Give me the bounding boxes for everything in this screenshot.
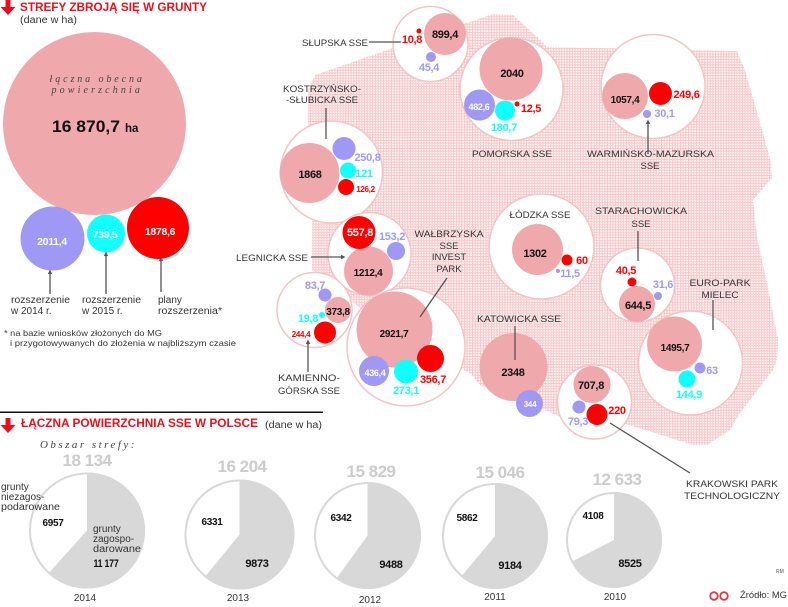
zone: Euro-Park Mielec: EURO-PARK xyxy=(690,278,751,289)
pie: 2013 xyxy=(186,457,294,604)
zone: Warmińsko-Mazurska SSE xyxy=(587,34,715,172)
pie: 2011 xyxy=(443,463,548,603)
bubble: total area xyxy=(3,32,186,215)
zone: Kamienno-Górska SSE: GÓRSKA SSE xyxy=(278,386,340,397)
zone: Warmińsko-Mazurska SSE: WARMIŃSKO-MAZURSKA xyxy=(587,149,715,160)
icon: red down arrow xyxy=(0,418,16,433)
pie: 2012: 6342 xyxy=(330,513,352,524)
zone: Wałbrzyska SSE Invest Park: WAŁBRZYSKA xyxy=(414,229,484,240)
bubble: total area: 16 870,7 xyxy=(52,118,120,136)
zone: Wałbrzyska SSE Invest Park xyxy=(347,229,484,406)
pie: 2013: 9873 xyxy=(245,558,269,570)
zone: Wałbrzyska SSE Invest Park: 2921,7 xyxy=(380,329,409,340)
zone: Krakowski Park Technologiczny xyxy=(558,365,781,502)
zone: Krakowski Park Technologiczny: TECHNOLOGICZNY xyxy=(684,491,781,502)
zone: Kostrzyńsko-Słubicka SSE: 250,8 xyxy=(354,152,381,164)
arrow: planned xyxy=(160,258,162,292)
icon: copyright marks xyxy=(710,592,728,600)
source: Źródło: MG xyxy=(740,590,787,600)
zone: Kostrzyńsko-Słubicka SSE: 121 xyxy=(355,168,373,180)
arrow: 2014 xyxy=(48,271,52,294)
zone: Pomorska SSE: 482,6 xyxy=(468,102,490,112)
zone: Wałbrzyska SSE Invest Park: 273,1 xyxy=(393,385,419,397)
zone: Pomorska SSE: 180,7 xyxy=(491,122,517,134)
zone: Łódzka SSE: 60 xyxy=(576,255,588,267)
divider rule xyxy=(0,412,323,413)
zone: Kamienno-Górska SSE: 83,7 xyxy=(305,280,325,292)
zone: Kostrzyńsko-Słubicka SSE: -SŁUBICKA SSE xyxy=(286,95,358,106)
pie: 2012: 15 829 xyxy=(346,462,396,481)
subheading: (dane w ha) xyxy=(265,420,322,431)
pie: 2014: zagospo- xyxy=(93,534,134,545)
heading: ŁĄCZNA POWIERZCHNIA SSE W POLSCE xyxy=(21,418,258,430)
zone: Łódzka SSE xyxy=(489,194,594,299)
zone: Kamienno-Górska SSE: KAMIENNO- xyxy=(278,373,340,384)
pie: 2010 xyxy=(567,470,662,603)
zone: Wałbrzyska SSE Invest Park: SSE xyxy=(439,241,459,252)
zone: Euro-Park Mielec: 1495,7 xyxy=(661,343,690,354)
pie: 2014: 6957 xyxy=(42,518,64,529)
zone: Kamienno-Górska SSE: 19,8 xyxy=(298,313,318,325)
zone: Legnicka SSE: 557,8 xyxy=(347,227,373,239)
pie: 2014: niezagos- xyxy=(1,492,44,503)
label: 2015 extension: rozszerzenie xyxy=(82,295,141,306)
zone: Euro-Park Mielec: 63 xyxy=(706,365,718,377)
zone: Słupska SSE: 45,4 xyxy=(419,62,440,74)
pie: 2014: 11 177 xyxy=(94,558,119,570)
zone: Łódzka SSE: ŁÓDZKA SSE xyxy=(510,210,570,221)
bubble: planned extension: 1878,6 xyxy=(145,226,176,238)
icon: red down arrow xyxy=(0,0,16,15)
zone: Słupska SSE: 10,8 xyxy=(402,34,422,46)
pie: 2010: 4108 xyxy=(582,511,604,522)
author initials: RM xyxy=(776,569,784,575)
zone: Euro-Park Mielec: 144,9 xyxy=(676,389,702,401)
zone: Pomorska SSE: POMORSKA SSE xyxy=(472,149,552,160)
panel: łączna powierzchnia SSE w Polsce xyxy=(0,412,662,606)
zone: Warmińsko-Mazurska SSE: 30,1 xyxy=(654,108,675,120)
zone: Wałbrzyska SSE Invest Park: PARK xyxy=(436,264,462,275)
subheading: (dane w ha) xyxy=(20,15,77,26)
label: planned extension: rozszerzenia* xyxy=(158,306,222,317)
zone: Słupska SSE xyxy=(302,6,468,82)
zone: Katowicka SSE: KATOWICKA SSE xyxy=(477,314,561,325)
bubble: total area: ha xyxy=(125,123,139,135)
zone: Pomorska SSE: 2040 xyxy=(500,68,524,80)
zone: Pomorska SSE xyxy=(460,38,563,160)
pie: 2011: 2011 xyxy=(484,592,506,603)
pie: 2011: 5862 xyxy=(456,513,478,524)
pie: 2010: 2010 xyxy=(604,592,627,603)
zone: Kostrzyńsko-Słubicka SSE xyxy=(280,84,382,223)
bubble: 2014 extension: 2011,4 xyxy=(37,236,67,248)
zone: Starachowicka SSE: STARACHOWICKA xyxy=(595,206,688,217)
bubble: total area: łączna obecna xyxy=(50,74,144,85)
map of Poland xyxy=(308,14,778,445)
pie: 2014: 2014 xyxy=(74,593,97,604)
zone: Starachowicka SSE: 31,6 xyxy=(653,279,673,291)
pie: 2014: 18 134 xyxy=(62,451,113,470)
zone: Wałbrzyska SSE Invest Park: 436,4 xyxy=(364,368,386,378)
zone: Kamienno-Górska SSE: 373,8 xyxy=(326,307,350,318)
bubble: planned extension xyxy=(127,197,189,259)
pie: 2011: 15 046 xyxy=(476,463,525,482)
bubble: 2015 extension: 739,5 xyxy=(93,229,118,241)
pie: 2012: 9488 xyxy=(379,559,403,571)
zone: Starachowicka SSE: SSE xyxy=(631,219,651,230)
footnote: i przygotowywanych do złożenia w najbliższym czasie xyxy=(10,338,236,348)
zone: Kamienno-Górska SSE: 244,4 xyxy=(292,330,311,339)
zone: Pomorska SSE: 12,5 xyxy=(521,103,541,115)
zone: Łódzka SSE: 1302 xyxy=(523,248,547,260)
bubble: total area: powierzchnia xyxy=(50,85,142,96)
zone: Kostrzyńsko-Słubicka SSE: 1868 xyxy=(298,169,322,181)
zone: Legnicka SSE: LEGNICKA SSE xyxy=(236,253,308,264)
zone: Euro-Park Mielec xyxy=(638,278,751,415)
pie: 2013: 16 204 xyxy=(218,457,268,476)
zone: Starachowicka SSE xyxy=(595,206,688,322)
zone: Starachowicka SSE: 40,5 xyxy=(616,265,636,277)
zone: Krakowski Park Technologiczny: KRAKOWSKI PARK xyxy=(686,479,779,490)
zone: Wałbrzyska SSE Invest Park: 356,7 xyxy=(420,374,446,386)
zone: Kostrzyńsko-Słubicka SSE: KOSTRZYŃSKO- xyxy=(283,84,361,95)
zone: Warmińsko-Mazurska SSE: SSE xyxy=(640,161,660,172)
pie: 2014 xyxy=(1,451,145,604)
zone: Starachowicka SSE: 644,5 xyxy=(625,300,651,312)
zone: Legnicka SSE: 153,2 xyxy=(379,231,405,243)
bubble: 2014 extension xyxy=(20,206,84,270)
zone: Wałbrzyska SSE Invest Park: INVEST xyxy=(432,252,466,263)
arrow: 2015 xyxy=(104,253,108,294)
pie: 2013: 6331 xyxy=(201,517,223,528)
zone: Słupska SSE: 899,4 xyxy=(432,29,459,41)
pie: 2014: podarowane xyxy=(1,502,60,513)
footnote: * na bazie wniosków złożonych do MG xyxy=(4,328,162,338)
zone: Warmińsko-Mazurska SSE: 249,6 xyxy=(673,89,700,101)
zone: Łódzka SSE: 11,5 xyxy=(560,268,580,280)
pie: 2012: 2012 xyxy=(359,595,382,606)
pie: 2010: 12 633 xyxy=(592,470,642,489)
pie: 2011: 9184 xyxy=(498,560,523,572)
heading: STREFY ZBROJĄ SIĘ W GRUNTY xyxy=(20,2,207,14)
label: 2015 extension: w 2015 r. xyxy=(81,306,123,317)
zone: Krakowski Park Technologiczny: 79,3 xyxy=(568,416,588,428)
label: 2014 extension: rozszerzenie xyxy=(11,295,70,306)
zone: Warmińsko-Mazurska SSE: 1057,4 xyxy=(611,95,640,106)
pie: 2014: grunty xyxy=(93,524,121,535)
zone: Euro-Park Mielec: MIELEC xyxy=(702,290,739,301)
zone: Legnicka SSE xyxy=(236,212,411,296)
zone: Słupska SSE: SŁUPSKA SSE xyxy=(302,38,368,49)
pie: 2014: darowane xyxy=(93,544,141,555)
pie: 2013: 2013 xyxy=(227,593,250,604)
label: planned extension: plany xyxy=(158,295,182,306)
panel: strefy zbroją się w grunty xyxy=(0,0,236,348)
label: 2014 extension: w 2014 r. xyxy=(10,306,52,317)
zone: Krakowski Park Technologiczny: 220 xyxy=(608,405,626,417)
zone: Kostrzyńsko-Słubicka SSE: 126,2 xyxy=(356,185,376,194)
bubble: 2015 extension xyxy=(87,214,125,252)
pie: 2010: 8525 xyxy=(618,558,642,570)
pie: 2014: grunty xyxy=(1,482,29,493)
zone: Kamienno-Górska SSE xyxy=(277,272,352,397)
zone: Katowicka SSE: 344 xyxy=(524,400,537,409)
zone: Katowicka SSE xyxy=(477,314,561,417)
zone: Katowicka SSE: 2348 xyxy=(501,367,525,379)
zone: Legnicka SSE: 1212,4 xyxy=(354,268,383,279)
zone: Krakowski Park Technologiczny: 707,8 xyxy=(578,380,604,392)
caption: obszar strefy: Obszar strefy: xyxy=(40,439,137,451)
pie: 2012 xyxy=(315,462,421,606)
